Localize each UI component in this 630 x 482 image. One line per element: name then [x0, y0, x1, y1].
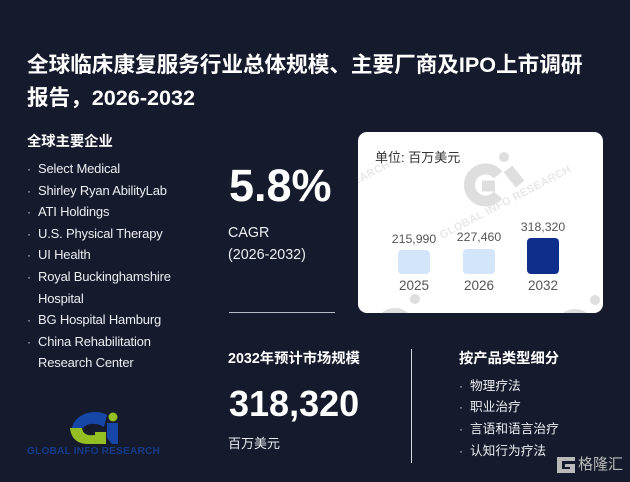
- company list: ·: [27, 248, 31, 262]
- segment list: ·: [459, 422, 463, 436]
- company list: [27, 161, 171, 370]
- bar group: 2032: 318,320: [521, 220, 565, 234]
- logo text: GLOBAL INFO RESEARCH: [27, 446, 160, 457]
- watermark: [358, 152, 600, 313]
- segment list: 物理疗法: [470, 379, 521, 393]
- company list: ·: [27, 162, 31, 176]
- bar group: 2025: 2025: [399, 278, 429, 293]
- bar group: 2025: [392, 232, 436, 293]
- company list: ·: [27, 184, 31, 198]
- bar chart: [392, 220, 565, 293]
- company list: UI Health: [38, 247, 91, 262]
- company list: Hospital: [38, 291, 84, 306]
- company list: ·: [27, 205, 31, 219]
- vertical divider: [411, 349, 412, 463]
- company list: ·: [27, 335, 31, 349]
- company list: Royal Buckinghamshire: [38, 269, 171, 284]
- company list: Select Medical: [38, 161, 120, 176]
- big number: market size: 318,320: [229, 383, 359, 424]
- segment list: 言语和语言治疗: [470, 422, 559, 436]
- heading: market size: 2032年预计市场规模: [228, 351, 360, 367]
- divider line under CAGR: [229, 312, 335, 313]
- text: CAGR period: (2026-2032): [228, 246, 306, 262]
- segment list: [459, 379, 559, 458]
- company list: U.S. Physical Therapy: [38, 226, 163, 241]
- panel: product segments: [459, 350, 559, 458]
- watermark: GLOBAL INFO RESEARCH: [438, 163, 573, 242]
- bar group: 2026: 227,460: [457, 230, 501, 244]
- segment list: 认知行为疗法: [470, 444, 546, 458]
- logo: Global Info Research: [27, 412, 160, 457]
- chart unit label: 单位: 百万美元: [375, 150, 460, 165]
- unit: million USD: 百万美元: [228, 436, 280, 451]
- text: CAGR period: CAGR: [228, 225, 269, 241]
- company list: ·: [27, 270, 31, 284]
- company list: Research Center: [38, 355, 134, 370]
- segment list: ·: [459, 400, 463, 414]
- bar group: 2032: 2032: [528, 278, 558, 293]
- bar group: 2032: [521, 220, 565, 293]
- segment list: ·: [459, 379, 463, 393]
- company list: ·: [27, 227, 31, 241]
- bar group: 2026: [457, 230, 501, 293]
- title: 报告，2026-2032: [27, 85, 195, 110]
- company list: China Rehabilitation: [38, 334, 151, 349]
- text: CAGR period: [228, 225, 306, 262]
- title: [27, 52, 582, 110]
- panel: bar chart card: [358, 132, 603, 313]
- brand name: 格隆汇: [578, 456, 623, 473]
- icon: Gi mark: [70, 412, 118, 444]
- heading: major companies: 全球主要企业: [27, 134, 113, 150]
- heading: segments: 按产品类型细分: [459, 351, 559, 367]
- panel: 2032 market size: [228, 350, 360, 451]
- company list: ·: [27, 313, 31, 327]
- panel: major companies: [27, 134, 171, 370]
- big number: CAGR: 5.8%: [229, 160, 332, 211]
- company list: Shirley Ryan AbilityLab: [38, 183, 167, 198]
- segment list: ·: [459, 444, 463, 458]
- brand watermark: Gelonghui: [557, 456, 623, 473]
- icon: G mark: [557, 457, 575, 473]
- title: 全球临床康复服务行业总体规模、主要厂商及IPO上市调研: [27, 52, 582, 77]
- company list: BG Hospital Hamburg: [38, 312, 161, 327]
- company list: ATI Holdings: [38, 204, 109, 219]
- bar group: 2026: 2026: [464, 278, 494, 293]
- segment list: 职业治疗: [470, 400, 521, 414]
- bar group: 2025: 215,990: [392, 232, 436, 246]
